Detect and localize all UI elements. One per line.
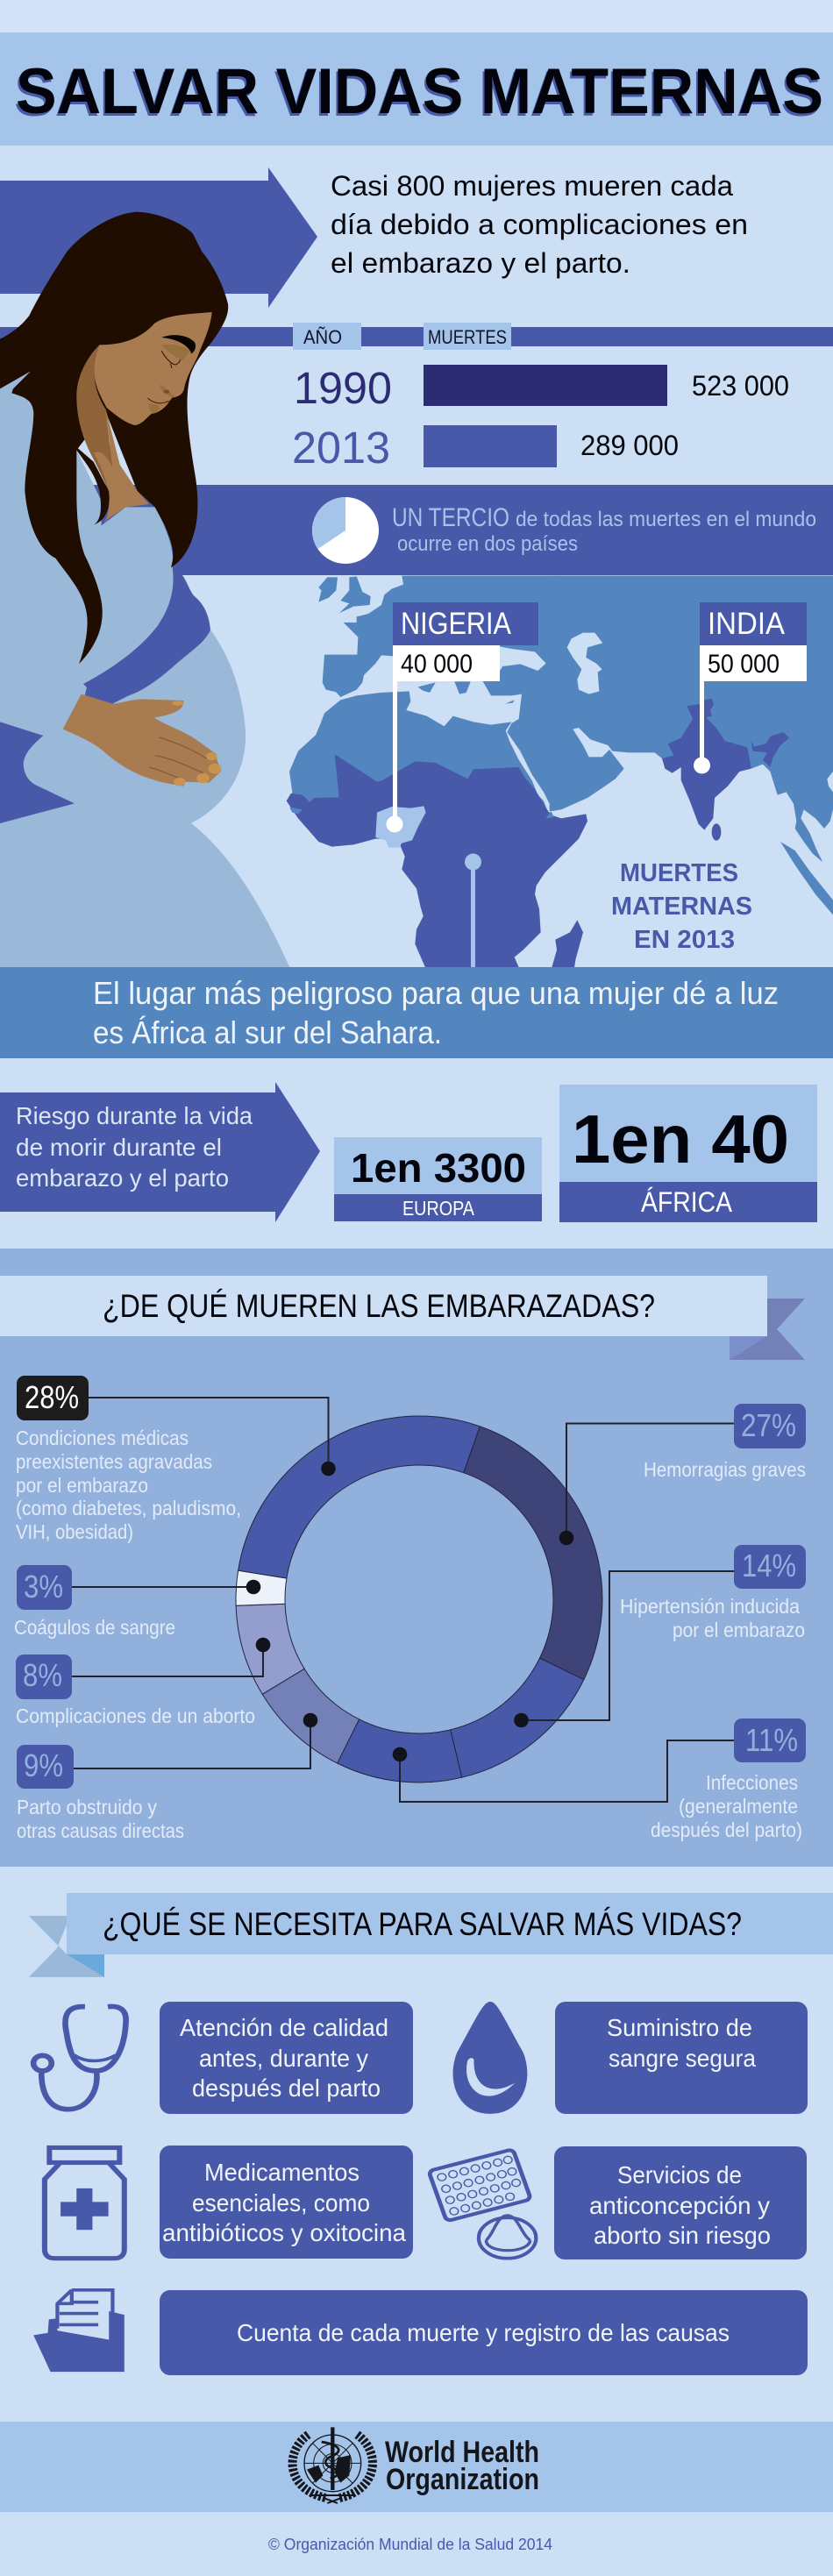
bar chart: deaths by year: 2013 [292, 423, 390, 473]
card: safe blood supply: sangre segura [609, 2045, 756, 2072]
card: essential medicines: antibióticos y oxitocina [162, 2219, 406, 2246]
stat: 9%: 9% [24, 1747, 63, 1783]
arrow: intro [0, 167, 317, 308]
card: quality care [160, 2002, 413, 2114]
stat: 27% [644, 1404, 806, 1481]
map caption [611, 859, 752, 954]
stat: 3% [14, 1565, 175, 1639]
table header stripe: AÑO [303, 326, 342, 348]
map pin: sub-Saharan Africa [465, 854, 481, 969]
arrow: lifetime risk: de morir durante el [16, 1134, 222, 1161]
card: quality care: después del parto [192, 2074, 381, 2102]
map label: Nigeria [386, 602, 538, 833]
title banner: SALVAR VIDAS MATERNAS [14, 59, 822, 130]
ribbon heading: causes [0, 1276, 805, 1360]
stat: 11%: Infecciones [706, 1771, 798, 1794]
icon: blood drop [453, 2002, 527, 2114]
card: essential medicines: esenciales, como [192, 2189, 370, 2217]
stat: 11%: (generalmente [679, 1795, 798, 1818]
stat: 11%: 11% [745, 1722, 798, 1758]
stat: Africa: 1en 40 [572, 1100, 789, 1178]
stat: Europe [334, 1137, 542, 1221]
logo wordmark [385, 2436, 539, 2496]
card: essential medicines [160, 2145, 413, 2259]
stat: 28%: Condiciones médicas [16, 1427, 189, 1449]
logo: WHO emblem [293, 2427, 373, 2503]
stat: 14%: por el embarazo [673, 1619, 805, 1641]
bar chart: deaths by year: 289 000 [580, 430, 679, 461]
map label: India [694, 602, 807, 773]
footer band with WHO logo [0, 2422, 833, 2512]
panel: causes of death [0, 1249, 833, 1867]
logo wordmark: World Health [385, 2436, 539, 2469]
intro text: Casi 800 mujeres mueren cada [331, 170, 733, 202]
stat: 27%: 27% [741, 1407, 796, 1443]
bar chart: deaths by year: 1990 [294, 363, 392, 413]
title banner [0, 32, 833, 146]
stat: Africa [559, 1085, 817, 1222]
stat: Europe: 1en 3300 [351, 1145, 526, 1191]
stat: 14%: 14% [742, 1548, 796, 1583]
illustration: pregnant woman [0, 212, 291, 971]
arrow: lifetime risk [0, 1082, 320, 1222]
callout: most dangerous place: es África al sur del Sahara. [93, 1014, 442, 1050]
stat: 28% [16, 1376, 241, 1543]
ribbon heading: solutions: ¿QUÉ SE NECESITA PARA SALVAR MÁS VIDAS? [103, 1906, 742, 1942]
intro text [331, 170, 748, 279]
icon: records folder [33, 2290, 125, 2372]
stat: 28%: por el embarazo [16, 1474, 148, 1497]
one third band: ocurre en dos países [397, 532, 578, 556]
intro text: día debido a complicaciones en [331, 209, 748, 240]
map label: India: INDIA [708, 607, 786, 641]
one third band: UN TERCIO [392, 503, 509, 532]
stat: 11% [651, 1719, 806, 1841]
callout: most dangerous place: El lugar más peligroso para que una mujer dé a luz [93, 975, 779, 1011]
table header stripe: MUERTES [428, 326, 507, 348]
ribbon heading: solutions [29, 1893, 833, 1977]
icon: medicine bottle [45, 2147, 125, 2259]
stat: 3%: Coágulos de sangre [14, 1616, 175, 1639]
copyright: © Organización Mundial de la Salud 2014 [268, 2536, 552, 2553]
map label: India: 50 000 [708, 650, 780, 679]
map caption: MATERNAS [611, 893, 752, 921]
stat: 9%: Parto obstruido y [17, 1796, 157, 1818]
card: quality care: Atención de calidad [180, 2014, 388, 2041]
card: essential medicines: Medicamentos [204, 2159, 360, 2186]
map label: Nigeria: 40 000 [401, 650, 473, 679]
ribbon heading: causes: ¿DE QUÉ MUEREN LAS EMBARAZADAS? [103, 1288, 655, 1324]
card: contraception services: Servicios de [617, 2161, 742, 2188]
card: contraception services: anticoncepción y [589, 2192, 770, 2219]
stat: 8%: 8% [23, 1657, 62, 1693]
map: maternal deaths 2013 [287, 576, 833, 967]
leader lines and dots [72, 1398, 734, 1802]
intro text: el embarazo y el parto. [331, 247, 630, 279]
stat: 28%: VIH, obesidad) [16, 1520, 133, 1543]
arrow: lifetime risk: embarazo y el parto [16, 1164, 229, 1192]
stat: Africa: ÁFRICA [641, 1186, 733, 1218]
map caption: EN 2013 [634, 926, 735, 954]
card: count every death [160, 2290, 808, 2375]
map label: Nigeria: NIGERIA [401, 607, 512, 641]
table header stripe [0, 323, 833, 350]
card: safe blood supply [555, 2002, 808, 2114]
icon: stethoscope [33, 2006, 126, 2110]
stat: 8%: Complicaciones de un aborto [16, 1704, 255, 1727]
stat: 9% [17, 1745, 184, 1842]
donut chart [236, 1416, 602, 1783]
logo wordmark: Organization [386, 2463, 539, 2496]
stat: 3%: 3% [24, 1569, 63, 1605]
bar chart: deaths by year: 523 000 [692, 370, 789, 402]
card: contraception services: aborto sin riesgo [594, 2222, 771, 2249]
card: count every death: Cuenta de cada muerte y registro de las causas [237, 2319, 730, 2346]
callout: most dangerous place [0, 967, 833, 1058]
stat: Europe: EUROPA [402, 1197, 475, 1220]
stat: 14% [620, 1545, 806, 1641]
stat: 28%: preexistentes agravadas [16, 1450, 212, 1473]
stat: 28%: (como diabetes, paludismo, [16, 1497, 241, 1519]
map caption: MUERTES [620, 859, 738, 887]
card: quality care: antes, durante y [199, 2045, 368, 2072]
icon: contraceptive pills and condom [429, 2149, 536, 2259]
bar chart: deaths by year [292, 363, 789, 473]
card: contraception services [554, 2146, 807, 2259]
stat: 11%: después del parto) [651, 1818, 802, 1841]
stat: 14%: Hipertensión inducida [620, 1595, 800, 1618]
arrow: lifetime risk: Riesgo durante la vida [16, 1102, 253, 1129]
stat: 8% [16, 1654, 255, 1727]
card: safe blood supply: Suministro de [607, 2014, 752, 2041]
stat: 28%: 28% [25, 1379, 79, 1415]
one third band: de todas las muertes en el mundo [516, 508, 816, 531]
one third band [0, 485, 833, 575]
stat: 27%: Hemorragias graves [644, 1458, 806, 1481]
stat: 9%: otras causas directas [17, 1819, 184, 1842]
